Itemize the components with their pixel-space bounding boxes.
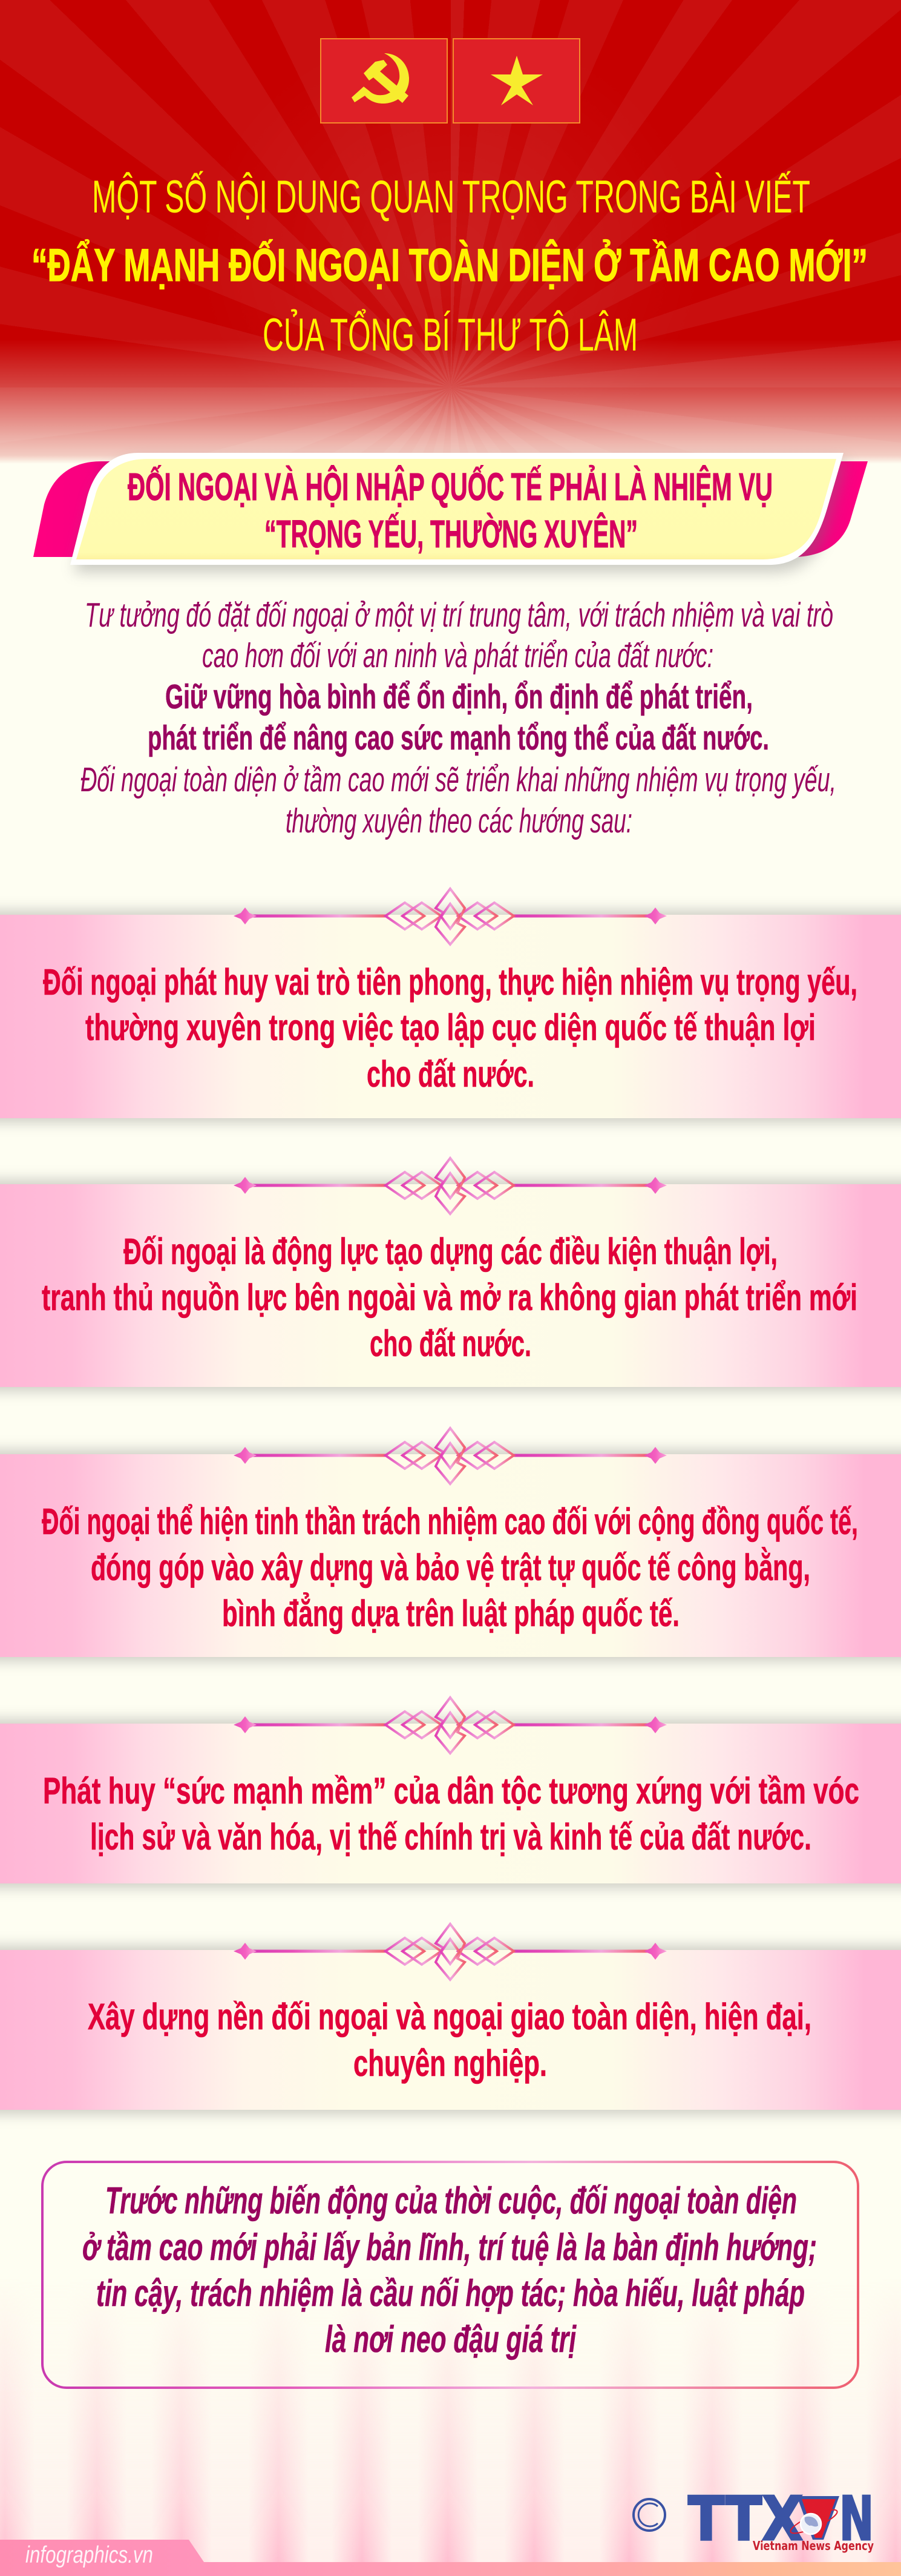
footer strip and source tab <box>0 2540 901 2576</box>
callout: closing statement: là nơi neo đậu giá trị <box>325 2319 577 2360</box>
intro text block: thường xuyên theo các hướng sau: <box>286 802 632 840</box>
panel: direction 1: cho đất nước. <box>367 1053 534 1095</box>
panel: direction 3 <box>0 1428 901 1661</box>
banner: section heading <box>33 453 868 572</box>
panel: direction 3: bình đẳng dựa trên luật pháp quốc tế. <box>222 1592 680 1634</box>
intro text block <box>80 596 836 840</box>
title <box>31 171 868 361</box>
panel: direction 5 <box>0 1924 901 2113</box>
banner: section heading: “TRỌNG YẾU, THƯỜNG XUYÊN” <box>264 512 638 556</box>
party flag with hammer and sickle <box>321 39 447 123</box>
national flag with star <box>453 39 580 123</box>
banner white and yellow plate <box>70 453 844 565</box>
panel: direction 4 <box>0 1698 901 1887</box>
header background with red rays <box>0 0 901 466</box>
logo: TTXVN Vietnam News Agency: TTX <box>688 2483 803 2554</box>
logo: TTXVN Vietnam News Agency: Vietnam News Agency <box>753 2538 874 2553</box>
title: CỦA TỔNG BÍ THƯ TÔ LÂM <box>263 309 638 361</box>
callout: closing statement <box>42 2162 858 2388</box>
panel: direction 2 <box>0 1158 901 1391</box>
panel: direction 1 <box>0 889 901 1122</box>
logo: TTXVN Vietnam News Agency: N <box>839 2483 874 2554</box>
flags <box>321 39 580 123</box>
panel: direction 5: chuyên nghiệp. <box>353 2043 547 2084</box>
footer pink streak background <box>0 2328 901 2562</box>
panel: direction 2: cho đất nước. <box>370 1323 531 1364</box>
icon: copyright symbol <box>634 2499 665 2531</box>
source text: infographics.vn <box>25 2542 153 2568</box>
banner magenta backing ribbon <box>33 461 868 557</box>
